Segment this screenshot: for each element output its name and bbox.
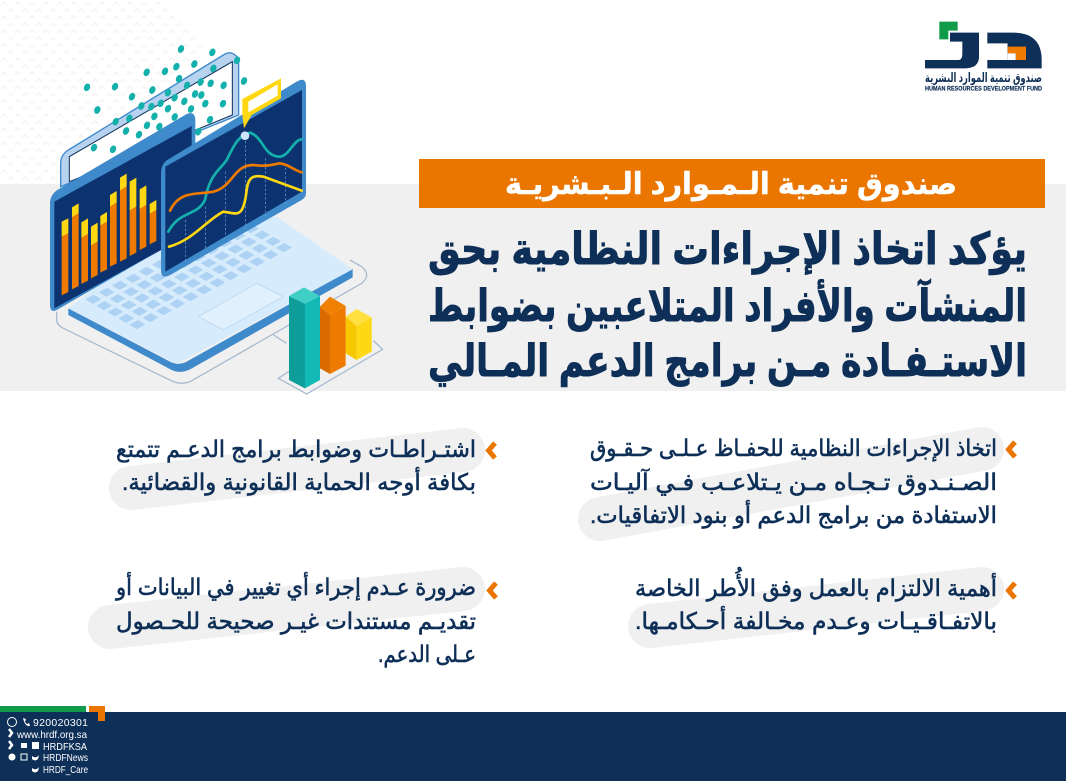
bullet: data accuracy: تقديـم مستندات غيـر صحيحة للحـصول xyxy=(116,608,476,635)
background gray band xyxy=(0,184,1066,391)
bullet: legal protection xyxy=(116,436,495,496)
logo xyxy=(925,22,1043,92)
bullet: legal action: الاستفادة من برامج الدعم أو بنود الاتفاقيات. xyxy=(590,500,997,529)
footer contact details: 920020301 xyxy=(33,717,88,729)
right screen: line chart xyxy=(161,80,306,277)
bullet: legal action: اتخاذ الإجراءات النظامية للحفـاظ عـلـى حـقـوق xyxy=(590,435,997,462)
laptop shadow outline xyxy=(57,260,367,383)
bullet: compliance xyxy=(635,566,1015,635)
laptop base xyxy=(68,217,353,372)
main heading xyxy=(428,225,1027,387)
footer green bar xyxy=(0,706,86,712)
footer contact details: HRDFKSA xyxy=(43,741,87,753)
bullet: legal protection: اشتـراطـات وضوابط برامج الدعـم تتمتع xyxy=(116,436,476,463)
back window xyxy=(61,53,239,187)
footer contact details: HRDFNews xyxy=(43,752,88,764)
3D bar chart xyxy=(289,287,372,388)
bullet: legal action: الصـنـدوق تـجـاه مـن يـتلاعـب فـي آليـات xyxy=(590,468,997,496)
footer xyxy=(0,706,1066,781)
title banner: صندوق تنمية الـمـوارد الـبـشريـة xyxy=(505,168,957,202)
bullet: legal protection: بكافة أوجه الحماية القانونية والقضائية. xyxy=(122,467,476,496)
title banner xyxy=(419,159,1045,208)
bullet: data accuracy xyxy=(110,572,496,668)
bullet: compliance: بالاتفـاقـيـات وعـدم مخـالفة أحـكامـها. xyxy=(635,606,997,635)
bullet: compliance: أهمية الالتزام بالعمل وفق الأُطر الخاصة xyxy=(635,566,997,602)
logo mark xyxy=(925,22,1042,68)
bullet: legal action xyxy=(590,435,1015,529)
bullet: data accuracy: عـلى الدعم. xyxy=(378,641,476,668)
background dot pattern xyxy=(0,0,205,184)
scattered data dots xyxy=(83,44,248,154)
3D bar tray outline xyxy=(273,335,383,394)
footer contact details xyxy=(8,717,88,776)
callout flag xyxy=(242,78,281,128)
footer orange corner xyxy=(89,706,105,721)
footer contact details: HRDF_Care xyxy=(43,764,88,776)
left screen: bar chart xyxy=(50,113,195,311)
logo English name: HUMAN RESOURCES DEVELOPMENT FUND xyxy=(925,86,1043,92)
footer contact details: www.hrdf.org.sa xyxy=(16,729,87,741)
illustration: laptop with charts xyxy=(50,44,383,394)
bullet: data accuracy: ضرورة عـدم إجراء أي تغيير في البيانات أو xyxy=(115,572,476,601)
